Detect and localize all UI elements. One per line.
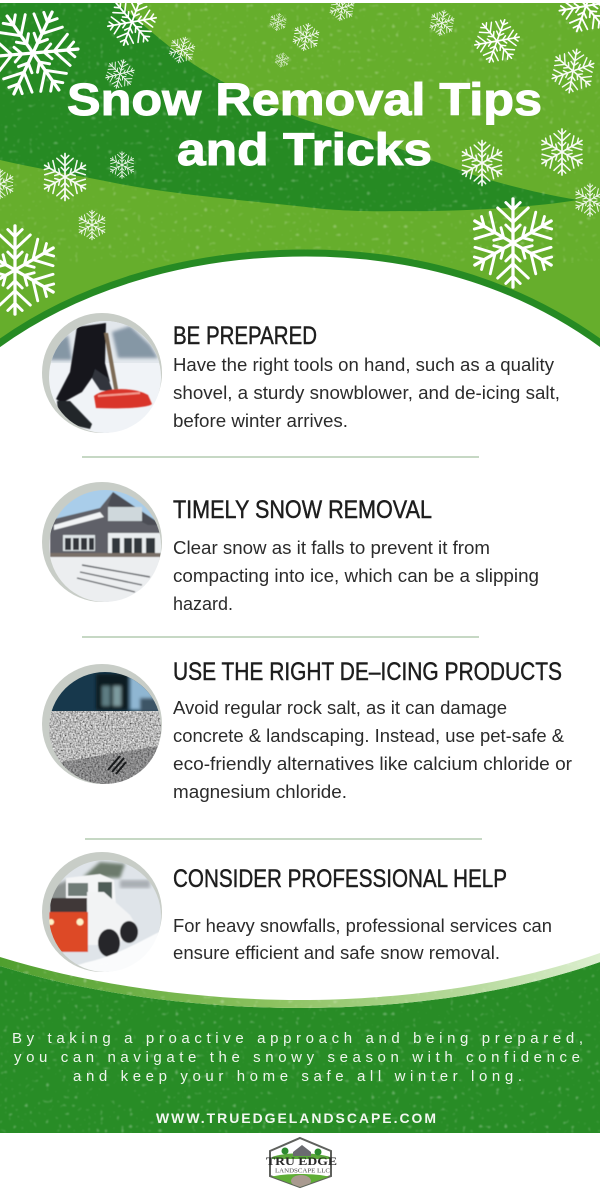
logo [266, 1138, 337, 1190]
white dome with green edge [0, 250, 600, 373]
logo: TRU EDGE [266, 1154, 337, 1168]
title: and Tricks [177, 124, 432, 175]
dark green swoosh [0, 3, 578, 211]
body text: shovel, a sturdy snowblower, and de-icing salt, [173, 383, 560, 403]
heading: CONSIDER PROFESSIONAL HELP [173, 865, 507, 893]
body text: eco-friendly alternatives like calcium chloride or [173, 754, 572, 774]
logo: LANDSCAPE LLC [275, 1168, 330, 1174]
header banner [0, 3, 600, 348]
body text: magnesium chloride. [173, 782, 347, 802]
heading: BE PREPARED [173, 322, 317, 350]
section: be prepared [42, 313, 560, 435]
section: de-icing products [42, 658, 572, 802]
snow speckle [0, 962, 600, 1133]
closing message: By taking a proactive approach and being prepared, [12, 1030, 583, 1047]
body text [173, 916, 552, 963]
title [67, 74, 542, 175]
body text: compacting into ice, which can be a slipping [173, 566, 539, 586]
body text: hazard. [173, 594, 233, 614]
body text: Have the right tools on hand, such as a quality [173, 355, 554, 375]
closing message [12, 1030, 583, 1085]
body text [173, 698, 572, 802]
section: professional help [42, 852, 552, 975]
body text: Avoid regular rock salt, as it can damage [173, 698, 507, 718]
photo: snowy house [42, 482, 164, 607]
body text: For heavy snowfalls, professional services can [173, 916, 552, 936]
section: timely snow removal [42, 482, 539, 614]
heading: TIMELY SNOW REMOVAL [173, 496, 432, 524]
closing message: you can navigate the snowy season with confidence [14, 1049, 580, 1066]
closing message: and keep your home safe all winter long. [73, 1068, 522, 1085]
website: WWW.TRUEDGELANDSCAPE.COM [156, 1110, 438, 1126]
footer green banner [0, 953, 600, 1133]
body text: Clear snow as it falls to prevent it from [173, 538, 490, 558]
photo: skid steer in snow [42, 852, 164, 975]
body text [173, 538, 539, 614]
photo: shoveling snow [42, 313, 164, 435]
snow speckle [0, 3, 600, 263]
title: Snow Removal Tips [67, 74, 542, 125]
photo: salted driveway [42, 664, 164, 787]
body text: concrete & landscaping. Instead, use pet-safe & [173, 726, 564, 746]
body text: before winter arrives. [173, 411, 348, 431]
body text [173, 355, 560, 431]
snowflakes [0, 0, 600, 314]
body text: ensure efficient and safe snow removal. [173, 943, 500, 963]
